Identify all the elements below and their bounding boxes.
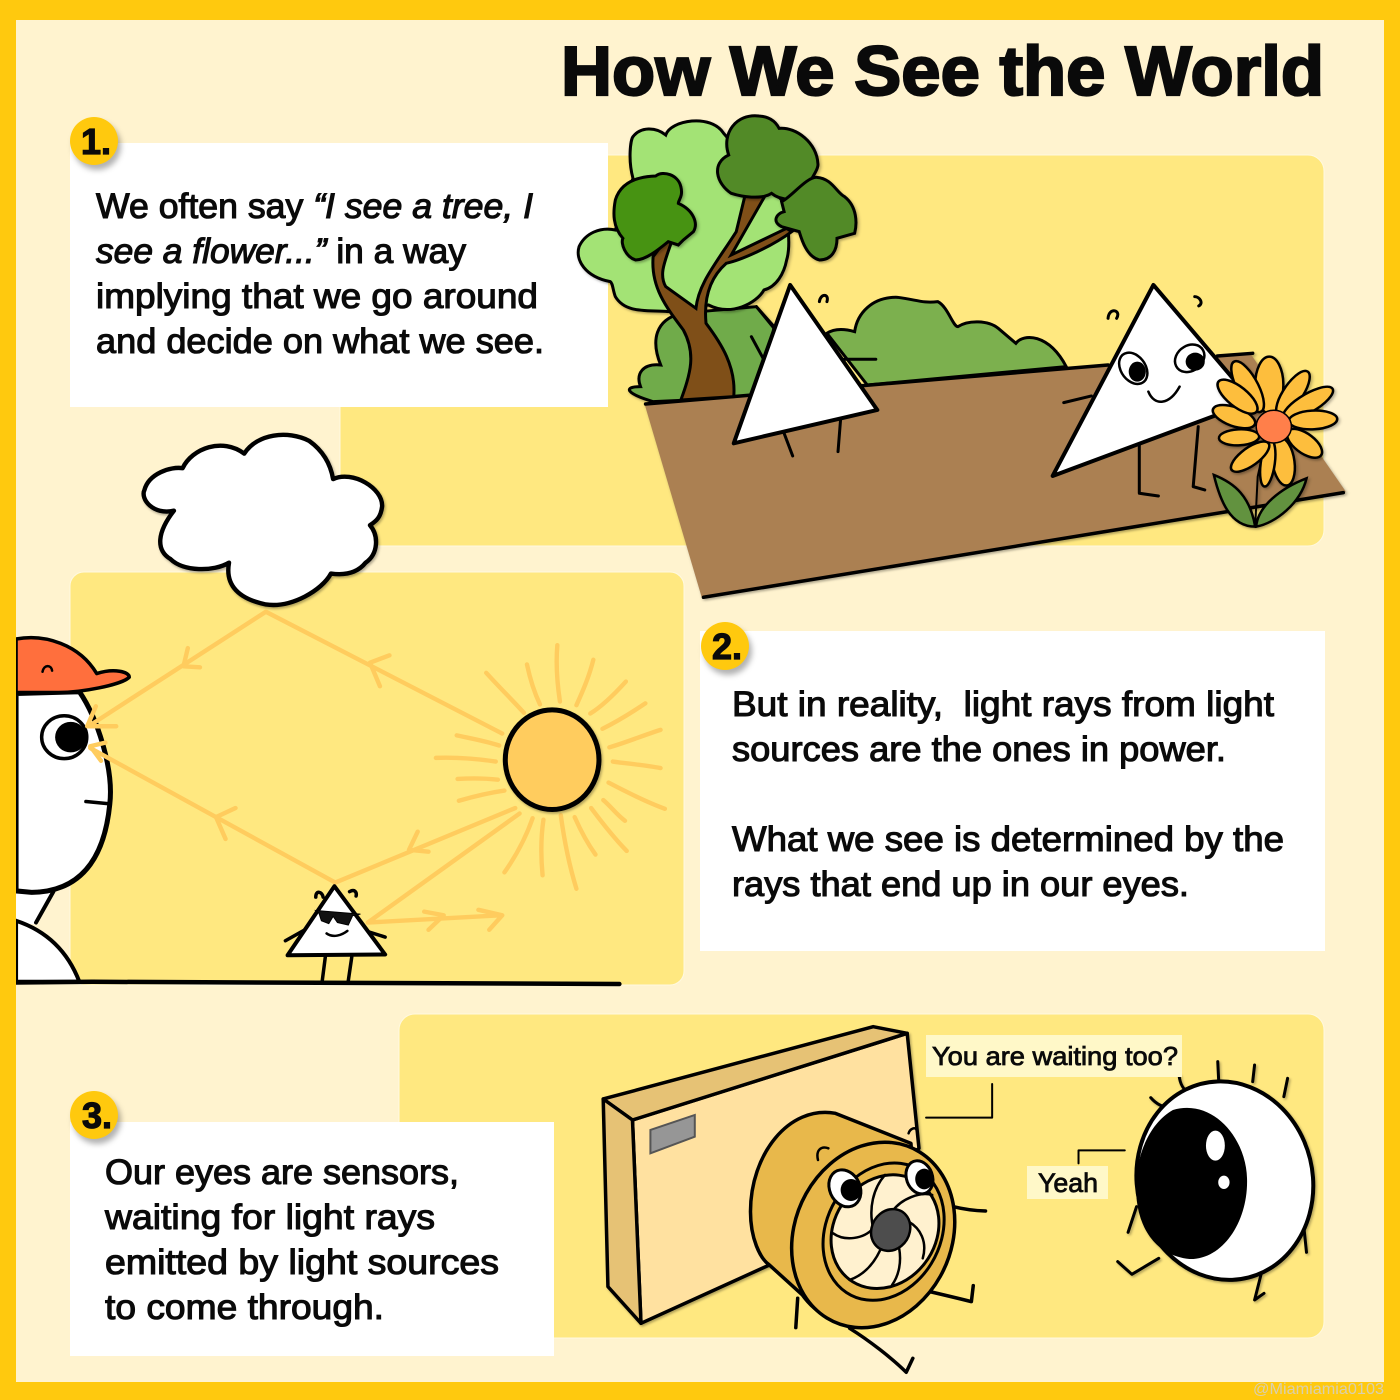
badge 3: 3. <box>82 1095 112 1136</box>
lens <box>750 1112 971 1335</box>
text block 3: to come through. <box>105 1288 384 1327</box>
bush behind tree <box>629 307 774 402</box>
text block 1: see a flower...” in a way <box>96 232 466 271</box>
illustration: triangles, tree and flower <box>578 116 1346 598</box>
eye character <box>1118 1062 1320 1300</box>
text block 2: rays that end up in our eyes. <box>732 865 1189 904</box>
title: How We See the World <box>561 32 1324 110</box>
panel: light rays background <box>70 572 684 985</box>
badge 1 <box>70 117 118 165</box>
badge 3 <box>70 1091 118 1139</box>
text block 2: sources are the ones in power. <box>732 730 1226 769</box>
tree canopy: light <box>578 121 789 312</box>
text block 3: Our eyes are sensors, <box>105 1153 459 1192</box>
text block 3: waiting for light rays <box>104 1198 435 1237</box>
camera limbs <box>796 1207 986 1372</box>
speech label: You are waiting too? <box>926 1035 1182 1077</box>
speech connector lines <box>926 1084 1125 1163</box>
text block 2: What we see is determined by the <box>732 820 1284 859</box>
tree canopy: dark left <box>614 173 695 260</box>
triangle character facing away <box>734 285 877 456</box>
badge 2 <box>701 622 749 670</box>
tree canopy: dark right <box>776 177 856 260</box>
badge 2: 2. <box>712 626 742 667</box>
text block 1 <box>70 143 608 407</box>
speech label: Yeah <box>1027 1166 1108 1199</box>
text block 3: emitted by light sources <box>105 1243 499 1282</box>
ground line <box>16 982 619 984</box>
text block 2 <box>700 631 1325 951</box>
triangle character with face <box>1053 285 1253 496</box>
flower <box>1207 357 1340 527</box>
speech label: Yeah: Yeah <box>1038 1168 1098 1198</box>
panel: camera and eye background <box>399 1014 1324 1338</box>
text block 2: But in reality, light rays from light <box>732 685 1274 724</box>
camera body <box>603 1027 919 1323</box>
badge 1: 1. <box>81 121 111 162</box>
watermark: @Miamiamia0103 <box>1253 1381 1384 1398</box>
speech label: You are waiting too?: You are waiting too? <box>932 1041 1178 1071</box>
light ray arrows <box>87 612 520 930</box>
illustration: camera character <box>603 1027 1320 1372</box>
triangle with sunglasses <box>285 886 385 981</box>
cloud <box>144 435 382 605</box>
ground <box>645 353 1346 598</box>
bush <box>827 297 1066 385</box>
text block 3 <box>70 1122 554 1356</box>
text block 1: implying that we go around <box>96 277 538 316</box>
text block 1: and decide on what we see. <box>96 322 544 361</box>
tree canopy: dark top <box>718 116 818 199</box>
sun <box>505 710 599 809</box>
illustration: light rays diagram <box>16 435 665 984</box>
person with cap <box>16 638 129 982</box>
tree trunk <box>653 190 792 400</box>
sun rays <box>436 645 665 889</box>
text block 1: We often say “I see a tree, I <box>96 187 533 226</box>
panel: tree scene background <box>340 155 1324 546</box>
